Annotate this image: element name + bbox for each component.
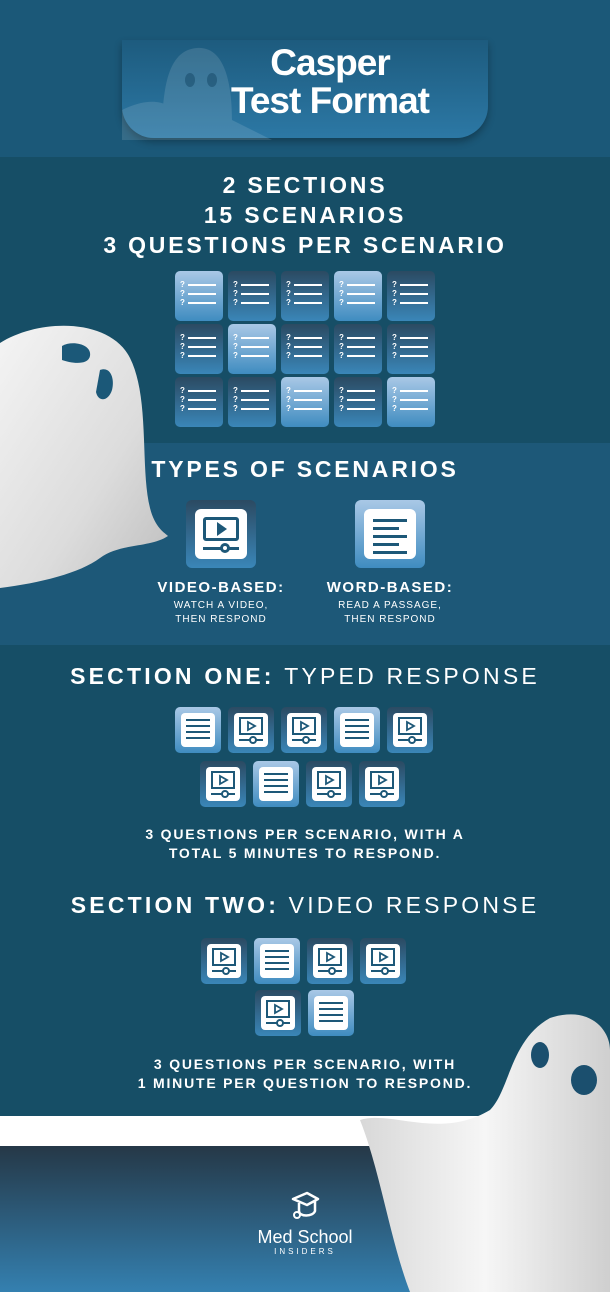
heading: section one: SECTION ONE: TYPED RESPONSE: [70, 663, 540, 689]
question tile grid: ?: [180, 386, 185, 395]
title: Casper: [270, 42, 390, 83]
question tile grid: [175, 271, 435, 427]
footer: [0, 1146, 610, 1292]
question tile grid: ?: [286, 298, 291, 307]
question tile grid: ?: [180, 404, 185, 413]
question tile grid: ?: [392, 333, 397, 342]
section one icons: [175, 707, 433, 807]
text: section one timing: 3 QUESTIONS PER SCENARIO, WITH A: [145, 826, 465, 842]
logo: Med School Insiders: [257, 1192, 353, 1256]
question tile grid: ?: [233, 386, 238, 395]
text: section one timing: TOTAL 5 MINUTES TO RESPOND.: [169, 845, 441, 861]
background: types band: [0, 443, 610, 645]
background: header band: [0, 0, 610, 157]
section two icons: [201, 938, 406, 1036]
question tile grid: ?: [339, 351, 344, 360]
stats heading: 2 SECTIONS: [223, 172, 387, 198]
question tile grid: ?: [233, 404, 238, 413]
white band: [0, 1116, 610, 1146]
question tile grid: ?: [339, 342, 344, 351]
logo: Med School Insiders: Med School: [257, 1227, 353, 1247]
text: section two timing: 3 QUESTIONS PER SCENARIO, WITH: [154, 1056, 456, 1072]
question tile grid: ?: [233, 280, 238, 289]
heading: types of scenarios: TYPES OF SCENARIOS: [151, 456, 459, 482]
question tile grid: ?: [286, 333, 291, 342]
question tile grid: ?: [339, 404, 344, 413]
icon: faint ghost: [122, 48, 272, 140]
label: word-based: WORD-BASED:: [327, 579, 453, 596]
text: section two timing: [138, 1056, 472, 1091]
label: word-based: [326, 579, 453, 625]
label: video-based: VIDEO-BASED:: [157, 579, 285, 596]
question tile grid: ?: [392, 342, 397, 351]
question tile grid: ?: [180, 298, 185, 307]
title: Test Format: [231, 80, 429, 121]
stats heading: 15 SCENARIOS: [204, 202, 406, 228]
question tile grid: ?: [180, 395, 185, 404]
question tile grid: ?: [286, 351, 291, 360]
question tile grid: ?: [339, 386, 344, 395]
question tile grid: ?: [286, 289, 291, 298]
question tile grid: ?: [233, 351, 238, 360]
logo: Med School Insiders: INSIDERS: [274, 1247, 336, 1256]
question tile grid: ?: [233, 289, 238, 298]
icon: left ghost: [0, 326, 168, 588]
question tile grid: ?: [392, 280, 397, 289]
question tile grid: ?: [180, 280, 185, 289]
question tile grid: ?: [180, 351, 185, 360]
label: word-based: READ A PASSAGE,: [338, 600, 442, 611]
question tile grid: ?: [180, 289, 185, 298]
title pill: [122, 40, 488, 138]
label: video-based: WATCH A VIDEO,: [174, 600, 268, 611]
stats heading: [103, 172, 507, 258]
label: word-based: THEN RESPOND: [344, 614, 436, 625]
icon: word-based: [355, 500, 425, 568]
question tile grid: ?: [233, 333, 238, 342]
question tile grid: ?: [286, 386, 291, 395]
question tile grid: ?: [339, 333, 344, 342]
question tile grid: ?: [233, 395, 238, 404]
stats heading: 3 QUESTIONS PER SCENARIO: [103, 232, 507, 258]
question tile grid: ?: [233, 342, 238, 351]
question tile grid: ?: [286, 404, 291, 413]
question tile grid: ?: [392, 289, 397, 298]
question tile grid: ?: [233, 298, 238, 307]
question tile grid: ?: [286, 280, 291, 289]
question tile grid: ?: [339, 289, 344, 298]
title: [231, 42, 430, 121]
label: video-based: THEN RESPOND: [175, 614, 267, 625]
icon: video-based: [186, 500, 256, 568]
question tile grid: ?: [339, 280, 344, 289]
question tile grid: ?: [392, 386, 397, 395]
heading: section two: SECTION TWO: VIDEO RESPONSE: [71, 892, 539, 918]
question tile grid: ?: [286, 395, 291, 404]
question tile grid: ?: [392, 395, 397, 404]
question tile grid: ?: [339, 395, 344, 404]
question tile grid: ?: [339, 298, 344, 307]
icon: grad cap: [292, 1192, 320, 1219]
text: section one timing: [145, 826, 465, 861]
question tile grid: ?: [180, 333, 185, 342]
question tile grid: ?: [286, 342, 291, 351]
icon: right ghost: [360, 1014, 610, 1292]
question tile grid: ?: [180, 342, 185, 351]
label: video-based: [157, 579, 285, 625]
question tile grid: ?: [392, 351, 397, 360]
text: section two timing: 1 MINUTE PER QUESTION TO RESPOND.: [138, 1075, 472, 1091]
question tile grid: ?: [392, 404, 397, 413]
question tile grid: ?: [392, 298, 397, 307]
